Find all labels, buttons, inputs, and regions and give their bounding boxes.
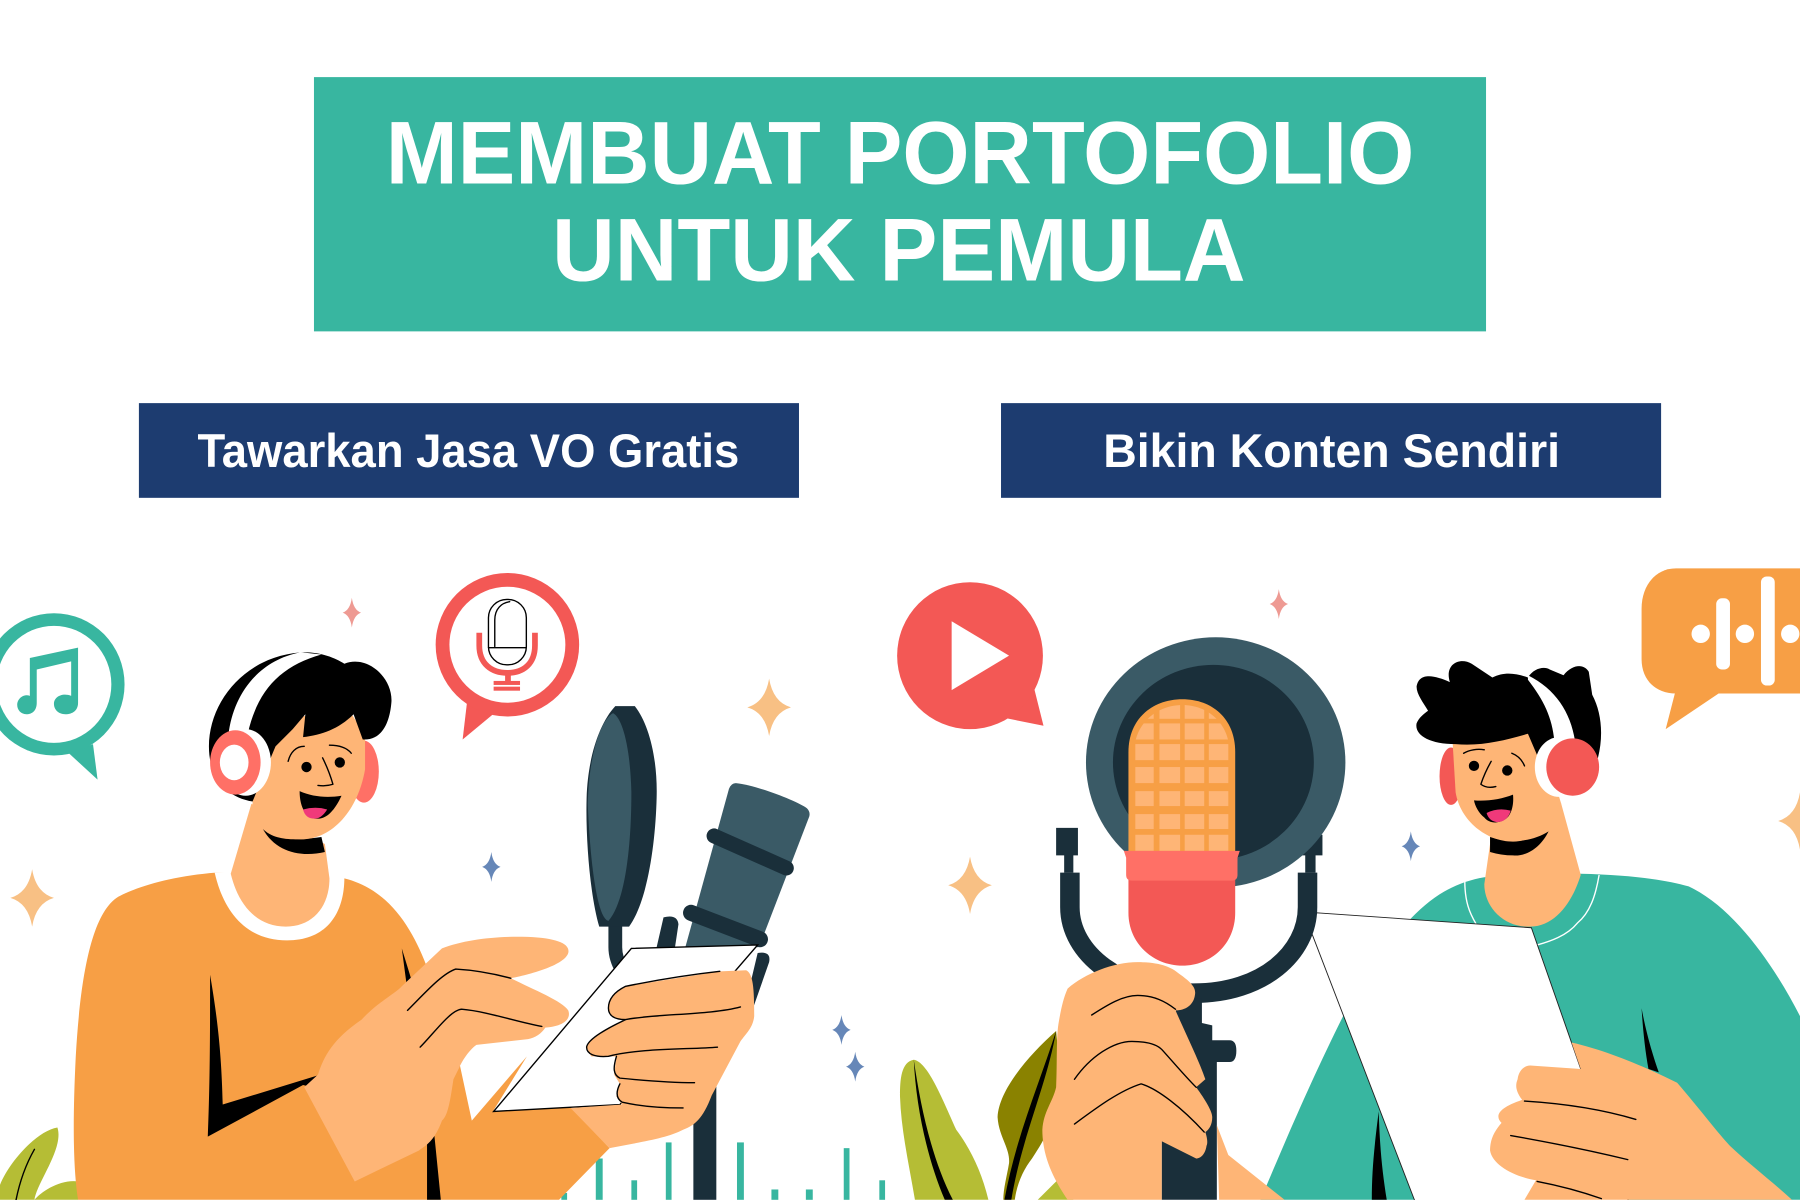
mic grille — [1128, 699, 1235, 852]
icon: microphone bubble — [436, 573, 579, 739]
mic collar — [1124, 851, 1240, 881]
mic stand pole — [693, 1085, 716, 1200]
pop filter stem — [615, 924, 622, 970]
headphone ear cup — [1535, 737, 1599, 797]
hair — [209, 652, 391, 801]
sound wave bars — [561, 1142, 885, 1200]
sparkles — [10, 589, 1800, 1082]
facial features — [288, 745, 351, 819]
face — [253, 712, 365, 839]
face — [1452, 729, 1561, 842]
paper — [494, 945, 758, 1111]
heading: right tip: Bikin Konten Sendiri — [1103, 424, 1560, 477]
title line 2: UNTUK PEMULA — [552, 199, 1246, 299]
headband — [228, 652, 321, 735]
left person — [74, 652, 758, 1200]
right person — [1260, 661, 1800, 1200]
neck — [1484, 804, 1581, 927]
neck shadow — [1490, 831, 1549, 856]
pointing hand — [304, 937, 569, 1181]
heading: left tip — [139, 403, 799, 498]
sleeve shadow — [1642, 1008, 1659, 1072]
far ear cup — [349, 741, 379, 803]
title line 1: MEMBUAT PORTOFOLIO — [386, 102, 1414, 202]
holding hand — [571, 970, 754, 1148]
heading: right tip — [1001, 403, 1661, 498]
left pop filter and microphone — [586, 706, 810, 1200]
collar lines — [1465, 875, 1599, 945]
teal shirt — [1260, 874, 1800, 1200]
heading: left tip: Tawarkan Jasa VO Gratis — [197, 424, 739, 477]
studio mic body — [685, 783, 810, 947]
hair — [1416, 661, 1601, 758]
shirt shadow — [208, 975, 320, 1137]
mic body — [1128, 873, 1235, 966]
cradle arc — [1070, 873, 1308, 993]
mic prongs — [657, 917, 769, 1008]
large studio microphone — [1042, 637, 1345, 1200]
facial features — [1464, 749, 1524, 822]
neck — [231, 804, 329, 927]
hand gripping mic — [1042, 962, 1285, 1200]
shirt collar — [215, 873, 344, 940]
icon: audio wave bubble — [1642, 568, 1800, 729]
pop filter — [586, 706, 657, 927]
far ear cup — [1440, 748, 1462, 805]
icon: play bubble — [897, 582, 1043, 729]
pop filter disc — [1086, 637, 1345, 888]
right hand — [1490, 1043, 1792, 1200]
mic top brackets — [1056, 828, 1322, 873]
stand pole — [1162, 999, 1236, 1200]
icon: music note bubble — [0, 613, 125, 780]
headband — [1528, 675, 1575, 741]
plant: bottom centre — [900, 1031, 1073, 1200]
title banner — [314, 77, 1486, 331]
plant: bottom left — [0, 1127, 78, 1200]
headphone ear cup — [210, 729, 271, 796]
script paper — [1311, 913, 1630, 1200]
neck shadow — [263, 829, 325, 854]
orange shirt — [74, 873, 610, 1200]
